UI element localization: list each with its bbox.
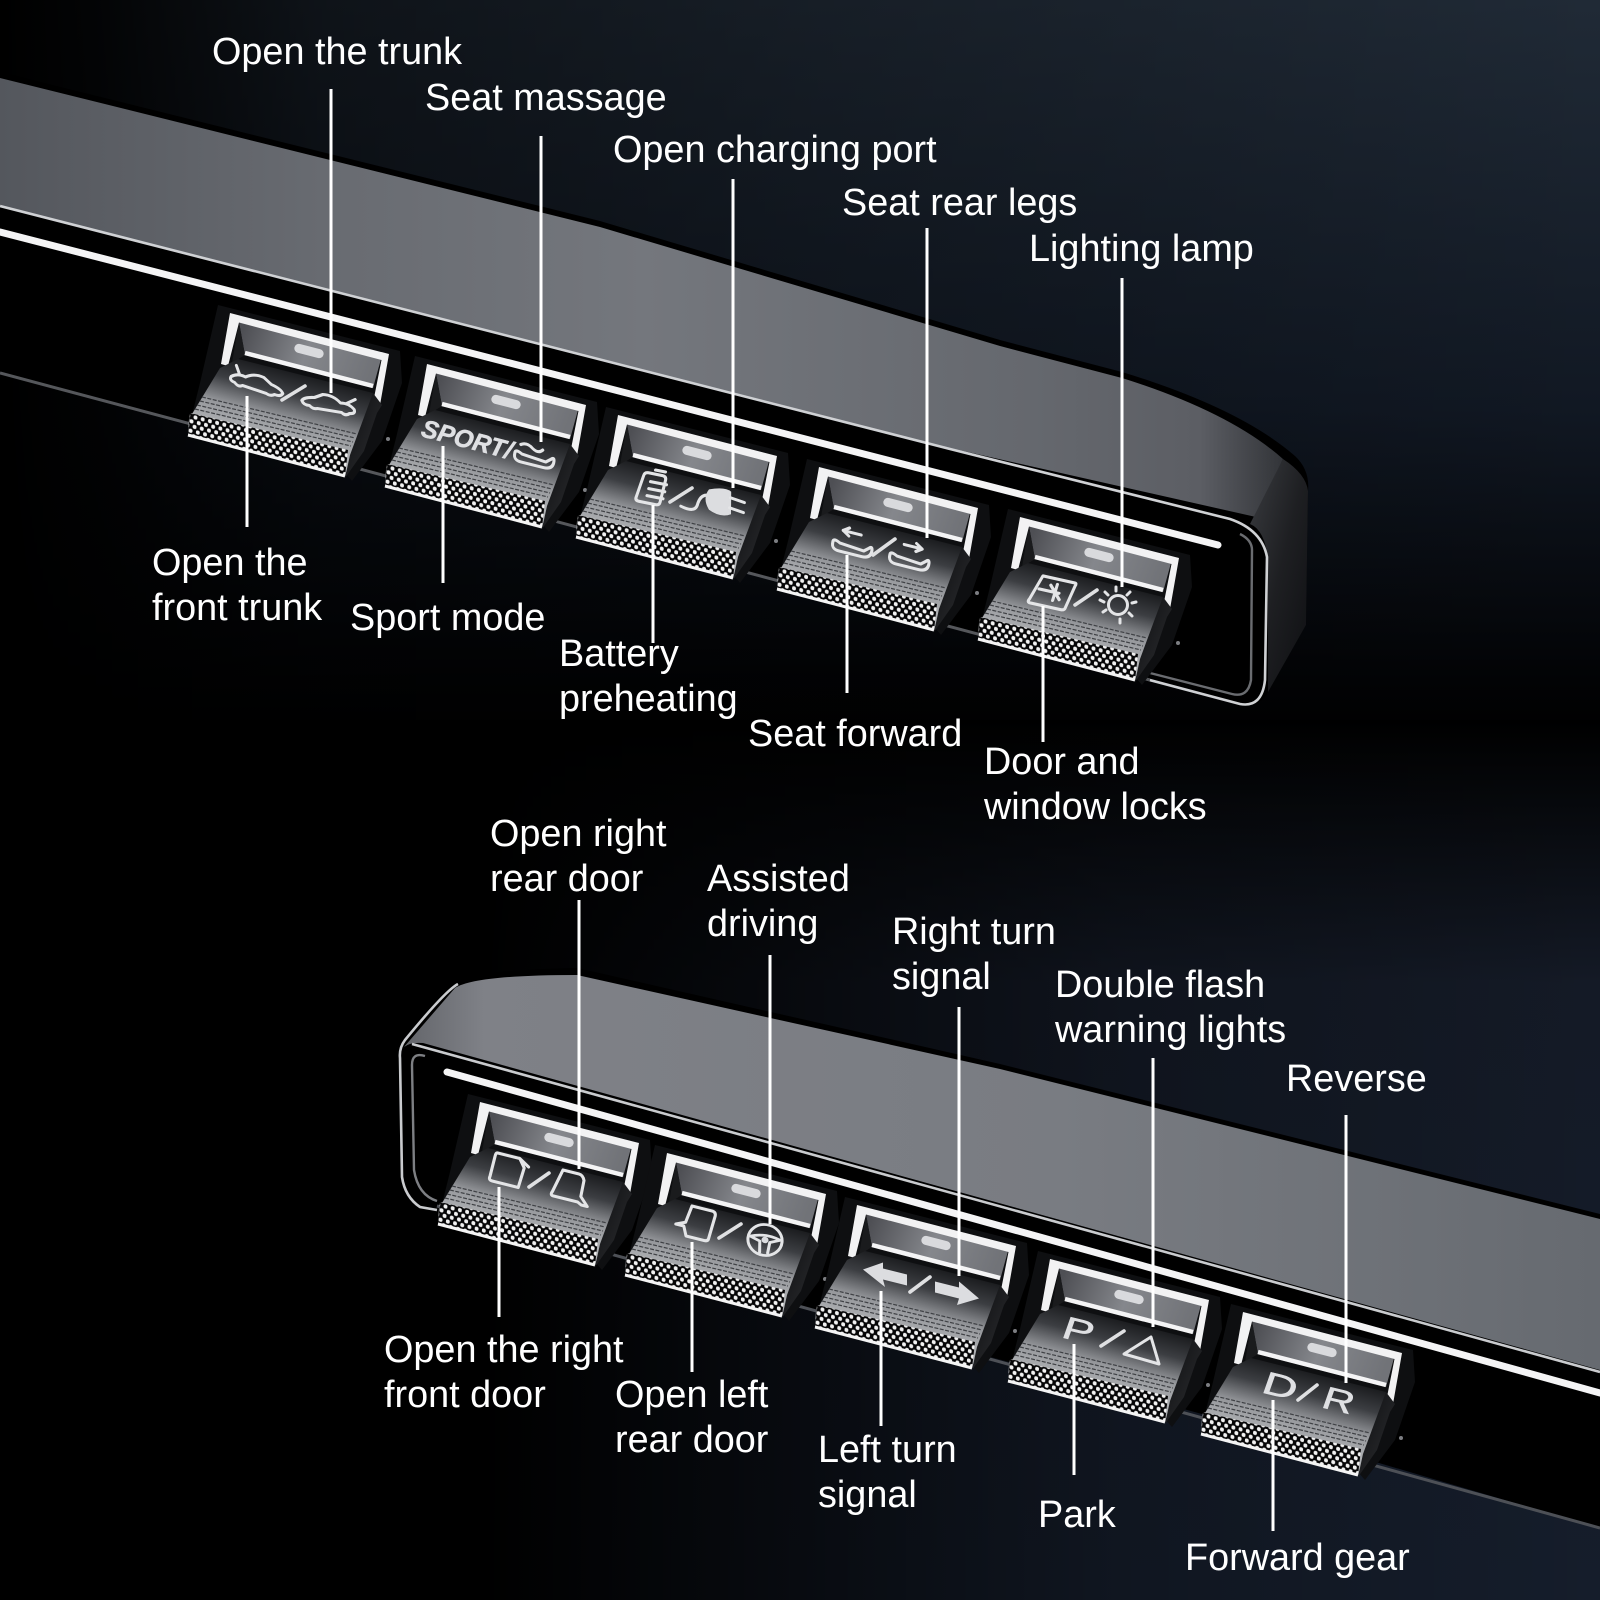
leader line: Assisted driving <box>768 955 772 1224</box>
icon: right rear door <box>551 1168 593 1206</box>
label: Open charging port: Open charging port <box>613 129 937 171</box>
label: Lighting lamp: Lighting lamp <box>1029 228 1254 270</box>
leader line: Battery preheating <box>652 505 654 643</box>
icon: slash <box>1101 1331 1124 1346</box>
label: Open left rear door: Open left <box>615 1374 769 1416</box>
leader line: Seat rear legs <box>926 228 928 538</box>
label: Seat massage: Seat massage <box>425 77 667 119</box>
upper bar highlight edge <box>0 206 1267 704</box>
icon: seat forward <box>832 524 874 559</box>
label: Open right rear door: Open right <box>490 813 667 855</box>
leader line: Left turn signal <box>880 1291 882 1426</box>
label: Open the front trunk: front trunk <box>152 587 322 629</box>
icon: charging plug <box>681 481 745 520</box>
lower bar white strip <box>447 1072 1600 1393</box>
leader line: Reverse <box>1344 1115 1348 1383</box>
icon: right front door <box>489 1152 530 1189</box>
label: Open the right front door: Open the right <box>384 1329 624 1371</box>
upper bar body <box>0 72 1308 705</box>
leader line: Forward gear <box>1272 1400 1274 1531</box>
label: Reverse: Reverse <box>1286 1058 1427 1100</box>
label: Double flash warning lights: Double flash <box>1055 964 1265 1006</box>
label: Open right rear door: rear door <box>490 858 643 900</box>
icon: slash <box>873 539 895 555</box>
icon text: P: P <box>1058 1311 1099 1351</box>
leader line: Open the right front door <box>498 1187 500 1317</box>
leader line: Door and window locks <box>1042 606 1044 742</box>
leader line: Double flash warning lights <box>1152 1058 1154 1327</box>
button: battery and charging port <box>576 407 790 583</box>
lower bar highlight edge <box>400 984 1600 1372</box>
icon: slash <box>282 386 305 400</box>
icon: slash <box>670 488 692 502</box>
lower bar bottom edge <box>437 1206 1600 1528</box>
label: Assisted driving: driving <box>707 903 818 945</box>
button: left rear door and assisted driving <box>625 1145 839 1321</box>
icon text: R: R <box>1318 1381 1359 1421</box>
leader line: Open left rear door <box>690 1242 694 1372</box>
icon: slash <box>529 1173 549 1187</box>
label: Left turn signal: Left turn <box>818 1429 957 1471</box>
label: Door and window locks: window locks <box>983 786 1207 828</box>
icon: lighting lamp <box>1100 587 1136 623</box>
label: Battery preheating: Battery <box>559 633 679 675</box>
icon text: D: D <box>1258 1365 1303 1407</box>
icon: slash <box>719 1224 741 1238</box>
icon text: SPORT: SPORT/ <box>418 415 518 466</box>
label: Park: Park <box>1038 1494 1116 1536</box>
icon: right turn arrow <box>935 1276 979 1310</box>
icon: steering wheel <box>746 1222 784 1258</box>
icon: left rear door <box>674 1203 716 1242</box>
leader line: Open the trunk <box>330 89 332 393</box>
leader line: Open right rear door <box>578 900 580 1169</box>
icon: window lock <box>1028 574 1076 611</box>
icon: battery <box>635 468 670 506</box>
button: door locks and lighting lamp <box>978 509 1192 685</box>
leader line: Sport mode <box>442 446 444 583</box>
label: Right turn signal: signal <box>892 956 991 998</box>
leader line: Seat forward <box>846 555 848 693</box>
button: park and double flash <box>1008 1251 1222 1427</box>
upper bar lower edge <box>0 373 1150 680</box>
label: Forward gear: Forward gear <box>1185 1537 1410 1579</box>
lower bar top surface <box>404 975 1600 1370</box>
label: Open left rear door: rear door <box>615 1419 768 1461</box>
upper bar corner side <box>1250 459 1308 692</box>
panel: lower switch bar <box>398 968 1600 1528</box>
lower bar body <box>398 968 1600 1528</box>
button: front door and rear door <box>438 1094 652 1270</box>
leader line: Seat massage <box>540 136 542 442</box>
label: Open the trunk: Open the trunk <box>212 31 462 73</box>
icon: left turn arrow <box>863 1258 907 1292</box>
leader line: Open charging port <box>732 179 734 488</box>
button: turn signals <box>815 1197 1029 1373</box>
leader line: Park <box>1072 1344 1076 1475</box>
icon: front trunk <box>230 364 284 398</box>
label: Assisted driving: Assisted <box>707 858 850 900</box>
button: trunk <box>188 305 402 481</box>
button: sport and massage <box>385 356 599 532</box>
icon: rear trunk <box>301 386 356 418</box>
label: Open the right front door: front door <box>384 1374 546 1416</box>
upper bar top surface <box>0 78 1283 517</box>
label: Sport mode: Sport mode <box>350 597 545 639</box>
panel: upper switch bar <box>0 72 1308 705</box>
icon: massage seat <box>514 441 555 470</box>
label: Battery preheating: preheating <box>559 678 738 720</box>
leader line: Open the front trunk <box>246 396 248 527</box>
label: Right turn signal: Right turn <box>892 911 1056 953</box>
upper bar white strip <box>0 232 1218 545</box>
label: Seat rear legs: Seat rear legs <box>842 182 1077 224</box>
icon: warning triangle <box>1124 1337 1159 1364</box>
button: forward gear and reverse <box>1201 1304 1415 1480</box>
leader line: Lighting lamp <box>1120 278 1124 587</box>
button: seat forward and rear legs <box>777 459 991 635</box>
label: Double flash warning lights: warning lights <box>1054 1009 1286 1051</box>
label: Left turn signal: signal <box>818 1474 917 1516</box>
icon: slash <box>910 1277 930 1292</box>
icon: slash <box>1298 1385 1317 1400</box>
label: Open the front trunk: Open the <box>152 542 308 584</box>
icon: seat rear legs <box>889 537 931 572</box>
label: Door and window locks: Door and <box>984 741 1140 783</box>
icon: slash <box>1075 590 1097 605</box>
label: Seat forward: Seat forward <box>748 713 962 755</box>
leader line: Right turn signal <box>958 1007 960 1276</box>
